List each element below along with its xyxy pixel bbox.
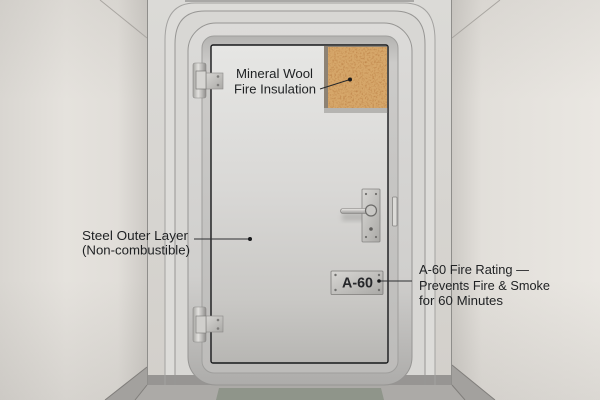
label: A-60 fire rating xyxy=(377,262,550,308)
label: steel outer layer xyxy=(82,228,252,258)
floor mat xyxy=(216,388,384,400)
top hinge xyxy=(193,63,223,98)
mineral wool insulation xyxy=(328,47,387,108)
door frame xyxy=(188,23,412,385)
label: mineral wool: Mineral Wool xyxy=(236,66,313,81)
skirting boards xyxy=(105,365,495,400)
bottom hinge xyxy=(193,307,223,342)
label: mineral wool: Fire Insulation xyxy=(234,82,316,96)
door leaf: steel outer layer xyxy=(211,45,388,363)
label: steel outer layer: (Non-combustible) xyxy=(82,242,190,258)
insulation cutout xyxy=(324,46,387,113)
rating plate: A-60 xyxy=(342,276,373,292)
label: A-60 fire rating: Prevents Fire & Smoke xyxy=(419,278,550,293)
label: mineral wool xyxy=(234,66,352,96)
moulding lines xyxy=(148,0,452,385)
label: A-60 fire rating: A-60 Fire Rating — xyxy=(419,262,529,277)
label: steel outer layer: Steel Outer Layer xyxy=(82,228,189,243)
door surround mouldings xyxy=(147,0,452,375)
label: A-60 fire rating: for 60 Minutes xyxy=(419,293,504,308)
rating plate xyxy=(331,271,383,294)
door pull on frame xyxy=(392,197,397,226)
door handle xyxy=(340,189,380,242)
